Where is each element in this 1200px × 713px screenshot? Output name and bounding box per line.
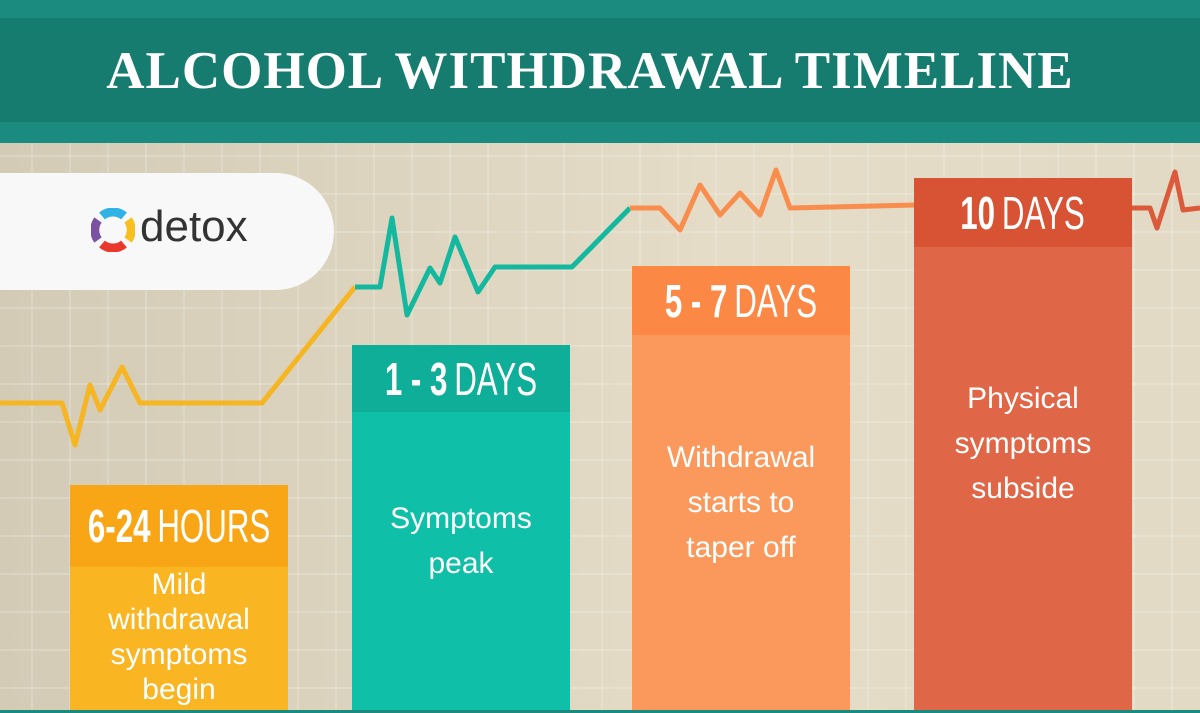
title: ALCOHOL WITHDRAWAL TIMELINE xyxy=(106,42,1074,100)
bar: 1-3 days: peak xyxy=(428,547,494,580)
title xyxy=(0,18,1200,122)
bar: 1-3 days xyxy=(352,345,570,710)
bar: 10 days: Physical xyxy=(967,382,1079,415)
bar: 5-7 days xyxy=(632,266,850,710)
bar: 6-24 hours xyxy=(70,485,288,710)
bar: 5-7 days: taper off xyxy=(686,531,796,564)
bar: 6-24 hours: Mild xyxy=(151,568,206,601)
bar: 5-7 days: 5 - 7DAYS xyxy=(665,274,817,326)
bar: 5-7 days: starts to xyxy=(688,486,794,519)
bar: 10 days: subside xyxy=(971,472,1075,505)
logo text: detox xyxy=(140,202,248,251)
bar: 6-24 hours: begin xyxy=(142,673,216,706)
bar: 5-7 days: Withdrawal xyxy=(667,441,815,474)
bar: 1-3 days: Symptoms xyxy=(390,502,532,535)
bar: 10 days xyxy=(914,178,1132,710)
icon: logo ring xyxy=(91,208,135,252)
bar: 1-3 days: 1 - 3DAYS xyxy=(385,352,537,404)
bar: 6-24 hours: 6-24HOURS xyxy=(88,500,270,552)
bar: 10 days: 10DAYS xyxy=(961,186,1085,238)
header band xyxy=(0,0,1200,143)
bar: 6-24 hours: withdrawal xyxy=(108,603,250,636)
bar: 10 days: symptoms xyxy=(955,427,1091,460)
bar: 6-24 hours: symptoms xyxy=(111,638,247,671)
logo pill xyxy=(0,173,334,290)
